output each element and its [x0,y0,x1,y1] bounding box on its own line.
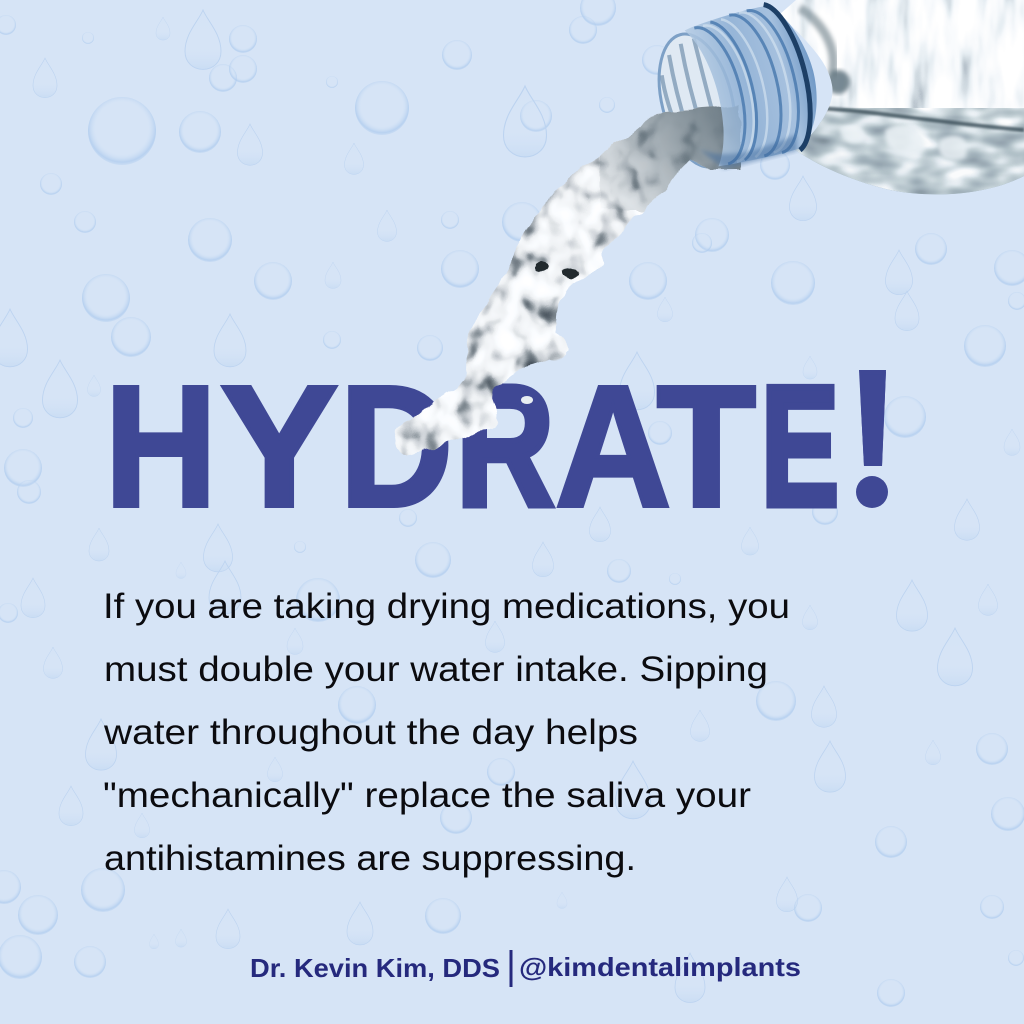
water stream [385,100,750,465]
body text: If you are taking drying medications, you [103,587,790,626]
title: HYDRATE!: T [657,349,756,543]
title: HYDRATE!: R [456,350,554,543]
title: HYDRATE!: D [340,350,453,544]
highlight droplet on R [521,396,533,404]
body text: water throughout the day helps [103,713,638,752]
footer credit: @kimdentalimplants [519,952,801,982]
bottle mouth interior [647,26,747,175]
footer credit: Dr. Kevin Kim, DDS [250,953,500,983]
title: HYDRATE!: ! [842,329,905,550]
illustration: bottle pouring water [385,0,1024,465]
body text: antihistamines are suppressing. [104,839,636,878]
title: HYDRATE!: H [105,349,217,543]
bottle neck [669,0,831,174]
title: HYDRATE!: Y [220,351,338,544]
title: HYDRATE! [113,370,888,508]
title: HYDRATE!: E [761,351,839,542]
bottle body [770,0,1024,200]
body text: "mechanically" replace the saliva your [103,776,751,815]
body text: must double your water intake. Sipping [104,650,768,689]
body text [103,587,790,878]
footer credit [250,950,801,987]
title: HYDRATE!: A [555,351,671,543]
